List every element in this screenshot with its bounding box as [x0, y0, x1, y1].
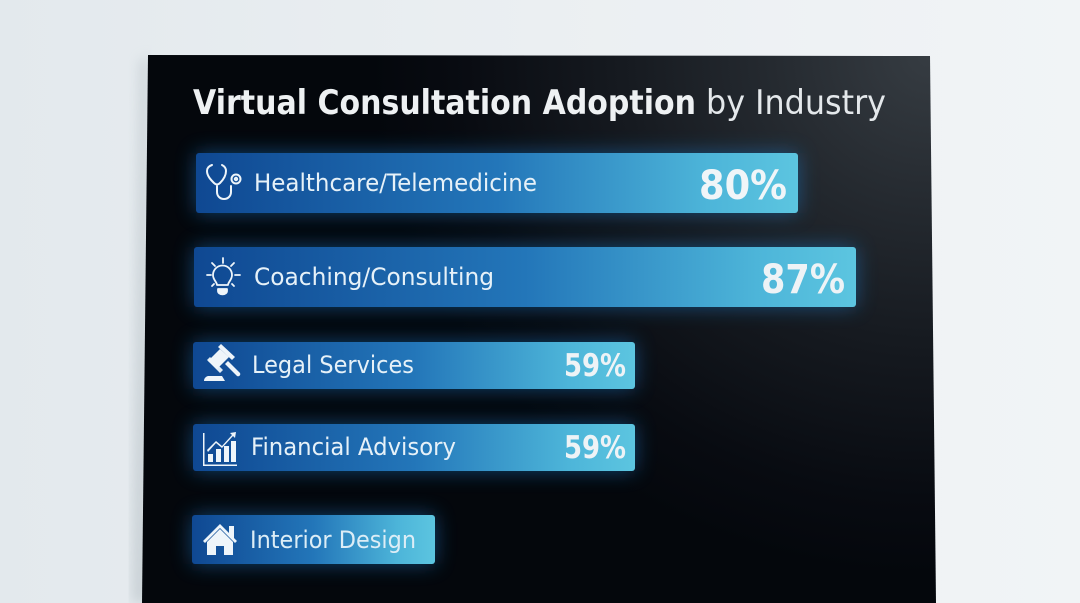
icon: gavel [204, 344, 240, 381]
value: 59% [564, 430, 626, 466]
icon: house [203, 524, 237, 555]
bar: Financial Advisory 59% [193, 424, 635, 471]
panel shadow [132, 55, 148, 603]
panel: dark board [142, 55, 936, 603]
icon: stethoscope [207, 165, 240, 199]
label: Financial Advisory [251, 433, 456, 461]
label: Coaching/Consulting [254, 263, 494, 291]
value: 80% [699, 163, 787, 209]
icon: light bulb [207, 258, 240, 294]
value: 87% [761, 257, 845, 303]
label: Legal Services [252, 351, 414, 379]
label: Healthcare/Telemedicine [254, 169, 537, 197]
bar: Interior Design [192, 515, 435, 564]
bar: Healthcare/Telemedicine 80% [196, 153, 798, 213]
icon: growth chart [203, 432, 237, 466]
title: Virtual Consultation Adoption [193, 83, 696, 123]
label: Interior Design [250, 526, 416, 554]
bar: Legal Services 59% [193, 342, 635, 389]
value: 59% [564, 348, 626, 384]
bar: Coaching/Consulting 87% [194, 247, 856, 307]
title: by Industry [706, 83, 886, 123]
